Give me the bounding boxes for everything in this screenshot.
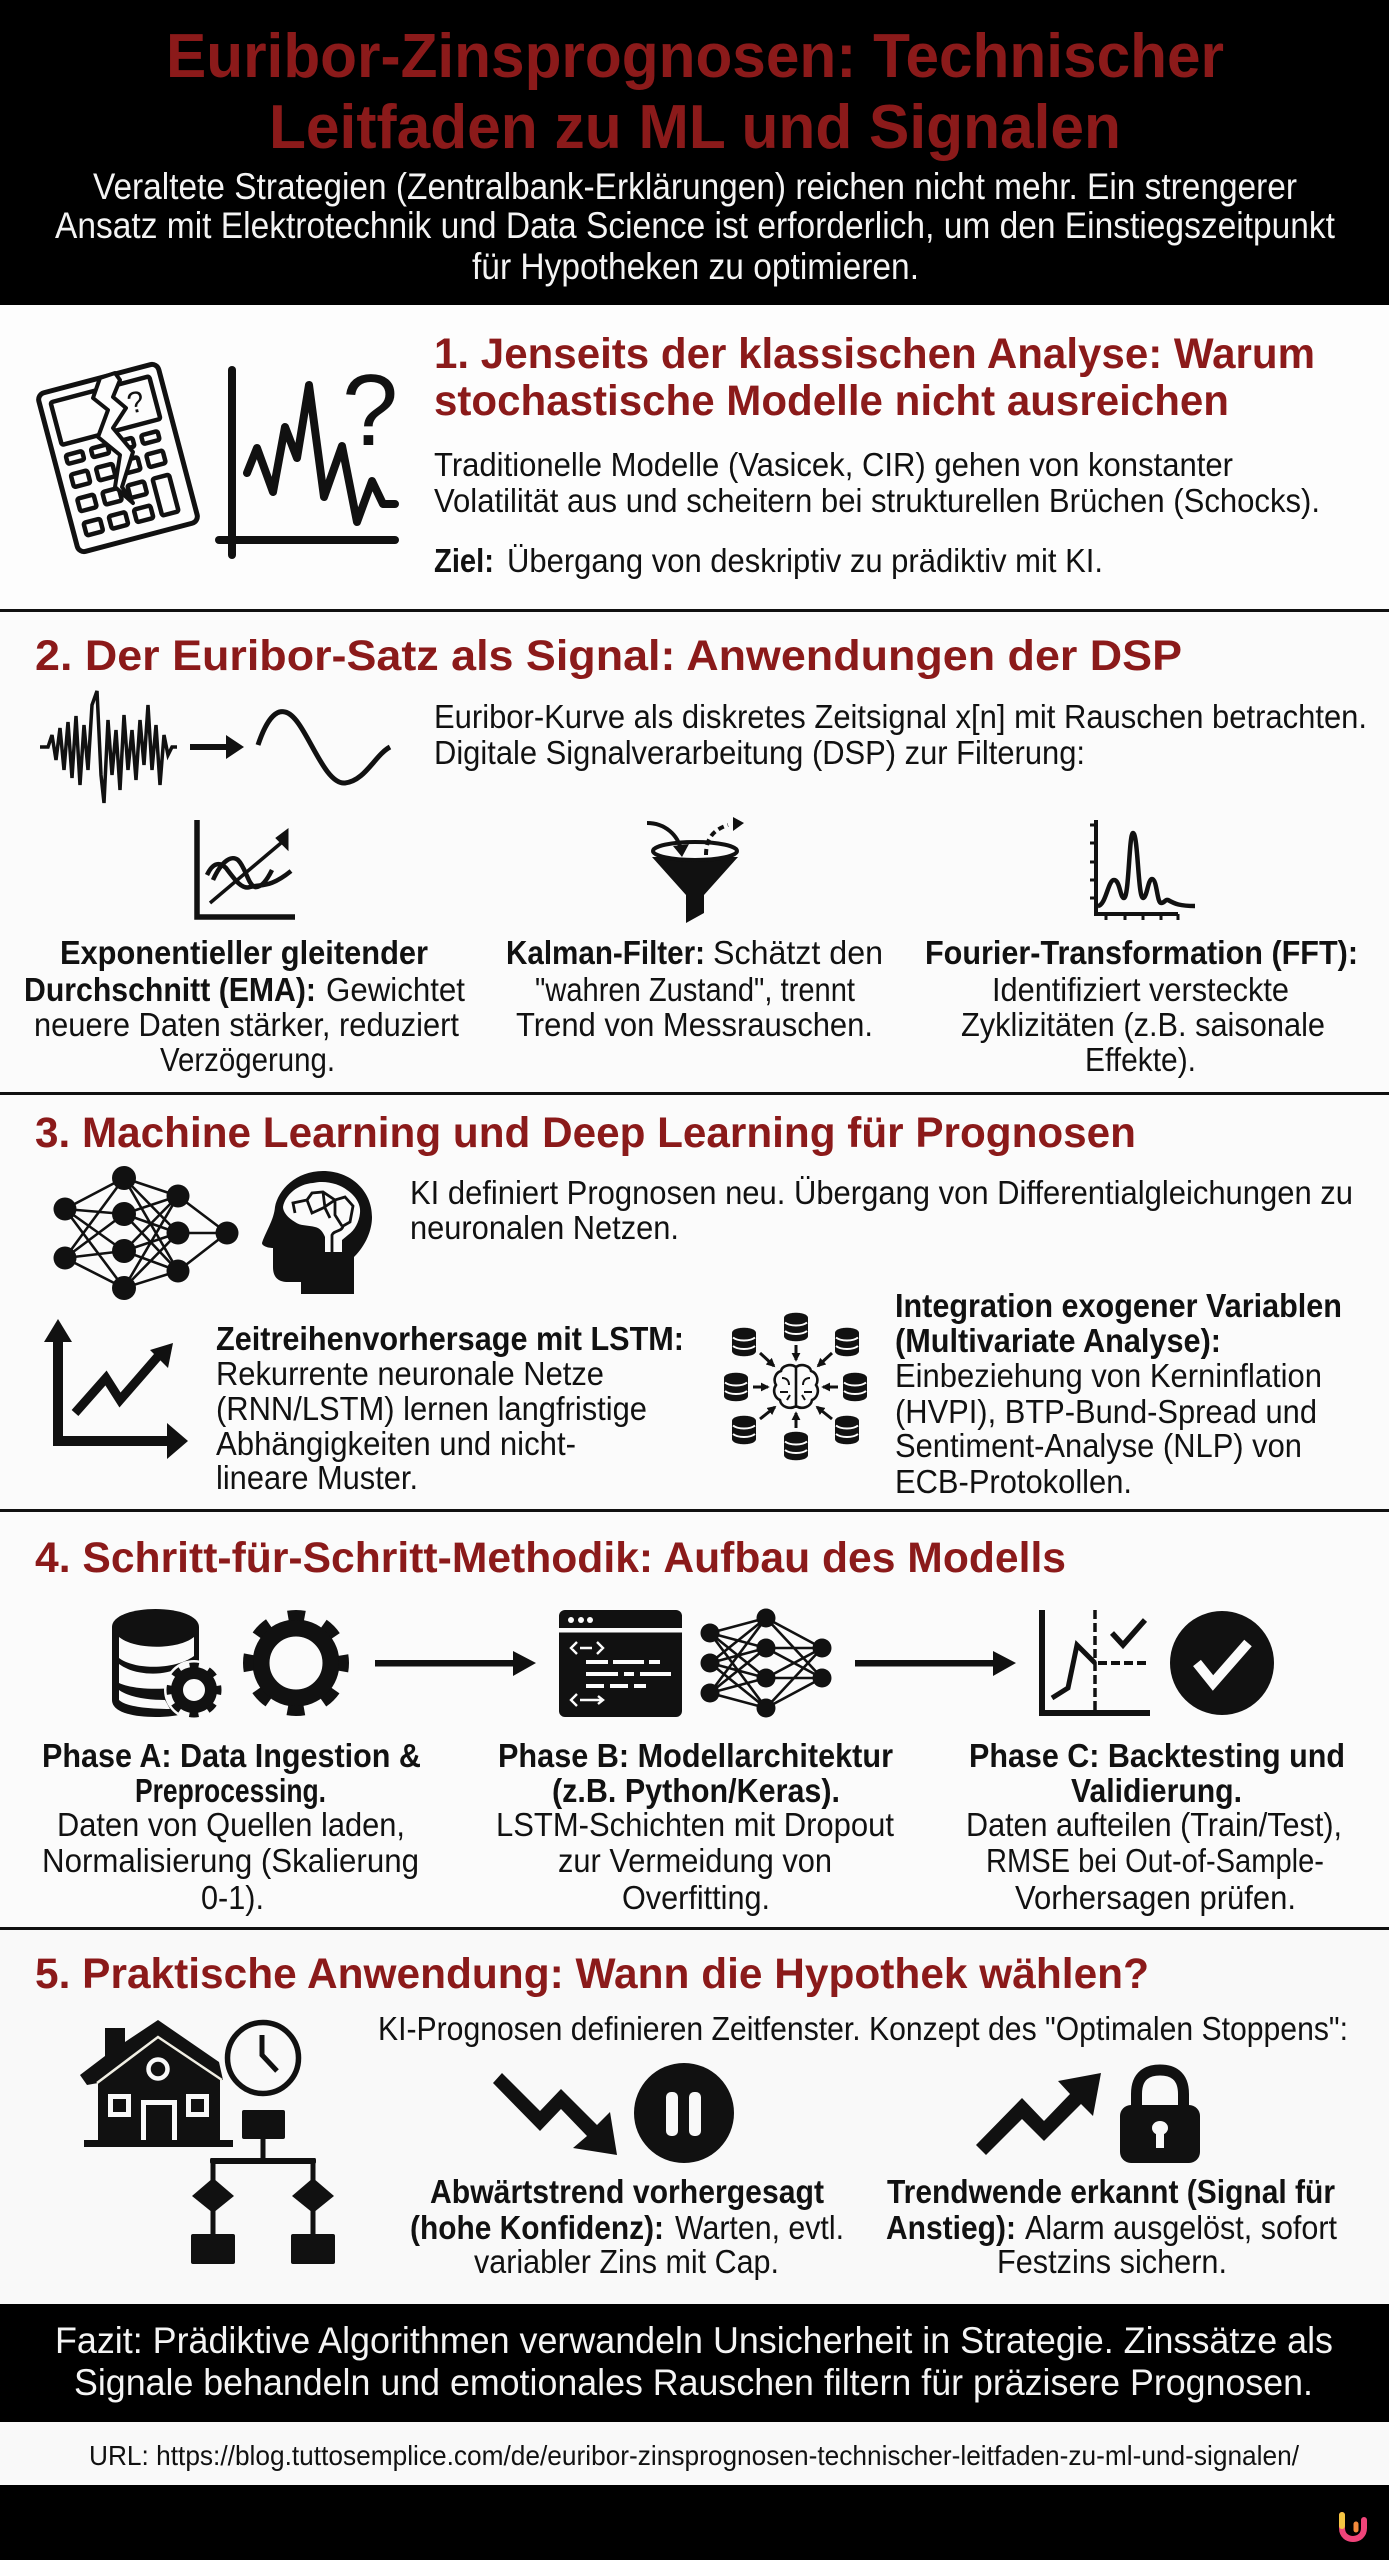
icon: house bbox=[80, 2020, 233, 2147]
text: phase A: Preprocessing. bbox=[135, 1772, 326, 1809]
text: FFT bbox=[925, 934, 1358, 1078]
text: phase B: Phase B: Modellarchitektur bbox=[498, 1737, 893, 1774]
text: phase B: (z.B. Python/Keras). bbox=[552, 1772, 840, 1809]
heading: section 4: 4. Schritt-für-Schritt-Methodik: Aufbau des Modells bbox=[35, 1534, 1066, 1582]
text: exogenous variables: (HVPI), BTP-Bund-Spread und bbox=[895, 1393, 1317, 1430]
text: phase A: Normalisierung (Skalierung bbox=[42, 1842, 419, 1879]
title: Leitfaden zu ML und Signalen bbox=[269, 93, 1121, 162]
subtitle: für Hypotheken zu optimieren. bbox=[472, 246, 919, 287]
text: phase B bbox=[496, 1737, 894, 1916]
text: LSTM: lineare Muster. bbox=[216, 1459, 418, 1496]
subtitle: Veraltete Strategien (Zentralbank-Erklärungen) reichen nicht mehr. Ein strengerer bbox=[93, 166, 1297, 207]
icon: database with gear bbox=[112, 1609, 224, 1720]
icon: check circle bbox=[1170, 1611, 1274, 1715]
text: FFT: Effekte). bbox=[1085, 1041, 1196, 1078]
text: trend reversal: Festzins sichern. bbox=[997, 2243, 1227, 2280]
text: section 1 body: Ziel: bbox=[434, 542, 494, 579]
text: EMA bbox=[24, 934, 465, 1078]
icon: cracked calculator bbox=[37, 363, 199, 553]
text: FFT: Zyklizitäten (z.B. saisonale bbox=[961, 1006, 1325, 1043]
text: trend reversal: Anstieg): bbox=[886, 2209, 1016, 2246]
text: EMA: Exponentieller gleitender bbox=[60, 934, 428, 971]
text: section 2 intro bbox=[434, 698, 1367, 771]
icon: upward trend arrow bbox=[976, 2073, 1101, 2155]
text: section 1 body: Traditionelle Modelle (Vasicek, CIR) gehen von konstanter bbox=[434, 446, 1233, 483]
icon: noisy signal to smooth wave bbox=[40, 691, 390, 803]
icon: downward trend arrow bbox=[493, 2073, 617, 2155]
heading: section 1: stochastische Modelle nicht ausreichen bbox=[434, 377, 1229, 425]
panel: section 3 bbox=[0, 1095, 1389, 1510]
icon: gear bbox=[248, 1615, 344, 1711]
text: trend reversal: Trendwende erkannt (Signal für bbox=[887, 2173, 1335, 2210]
text: section 3 intro bbox=[410, 1174, 1353, 1246]
icon: volatile chart with question mark: ? bbox=[342, 355, 398, 467]
text: exogenous variables: Sentiment-Analyse (NLP) von bbox=[895, 1427, 1302, 1464]
heading: section 5: 5. Praktische Anwendung: Wann die Hypothek wählen? bbox=[35, 1950, 1149, 1998]
text: LSTM: Zeitreihenvorhersage mit LSTM: bbox=[216, 1320, 684, 1357]
text: phase C: Daten aufteilen (Train/Test), bbox=[966, 1806, 1342, 1843]
icon: pause bbox=[634, 2063, 734, 2163]
title: Euribor-Zinsprognosen: Technischer bbox=[166, 22, 1224, 91]
panel: section 2 bbox=[0, 612, 1389, 1093]
heading: section 1: 1. Jenseits der klassischen Analyse: Warum bbox=[434, 330, 1315, 378]
text: LSTM: Abhängigkeiten und nicht- bbox=[216, 1425, 576, 1462]
icon: cracked calculator: ? bbox=[124, 385, 147, 421]
heading: section 2: 2. Der Euribor-Satz als Signal: Anwendungen der DSP bbox=[35, 632, 1182, 680]
text: exogenous variables: ECB-Protokollen. bbox=[895, 1463, 1132, 1500]
text: downward trend: variabler Zins mit Cap. bbox=[474, 2243, 779, 2280]
text: downward trend bbox=[410, 2173, 844, 2280]
text: trend reversal bbox=[886, 2173, 1337, 2280]
text: LSTM bbox=[216, 1320, 684, 1496]
footer bar bbox=[0, 2485, 1389, 2560]
text: downward trend: Warten, evtl. bbox=[675, 2209, 844, 2246]
text: phase C bbox=[966, 1737, 1345, 1916]
text: section 3 intro: KI definiert Prognosen neu. Übergang von Differentialgleichungen zu bbox=[410, 1174, 1353, 1211]
text: Kalman: Trend von Messrauschen. bbox=[516, 1006, 873, 1043]
panel: conclusion bbox=[0, 2304, 1389, 2422]
icon: EMA chart bbox=[197, 820, 295, 917]
icon: brain with data sources bbox=[724, 1313, 867, 1460]
text: phase A: Phase A: Data Ingestion & bbox=[42, 1737, 421, 1774]
text: LSTM: Rekurrente neuronale Netze bbox=[216, 1355, 604, 1392]
icon: growth chart with arrows bbox=[44, 1319, 188, 1459]
text: section 1 body bbox=[434, 446, 1320, 579]
icon: clock bbox=[228, 2022, 298, 2094]
panel: section 5 bbox=[0, 1930, 1389, 2304]
text: phase C: Phase C: Backtesting und bbox=[969, 1737, 1345, 1774]
subtitle bbox=[55, 166, 1336, 287]
panel: conclusion: Fazit: Prädiktive Algorithmen verwandeln Unsicherheit in Strategie. Zinssätze als bbox=[55, 2320, 1333, 2361]
panel: section 4 bbox=[0, 1512, 1389, 1928]
text: EMA: Gewichtet bbox=[326, 971, 465, 1008]
icon: backtesting chart bbox=[1042, 1610, 1150, 1713]
panel: header bbox=[0, 0, 1389, 305]
text: exogenous variables: Integration exogener Variablen bbox=[895, 1287, 1342, 1324]
icon: small neural network bbox=[700, 1608, 832, 1718]
arrow: phase A to B bbox=[375, 1651, 536, 1676]
text: downward trend: Abwärtstrend vorhergesagt bbox=[430, 2173, 824, 2210]
arrow: phase B to C bbox=[855, 1651, 1016, 1676]
icon: volatile chart with question mark bbox=[219, 355, 398, 555]
icon: neural network bbox=[54, 1166, 238, 1300]
text: section 1 body: Volatilität aus und scheitern bei strukturellen Brüchen (Schocks). bbox=[434, 482, 1320, 519]
text: Kalman: Schätzt den bbox=[713, 934, 883, 971]
panel: url: URL: https://blog.tuttosemplice.com/de/euribor-zinsprognosen-technischer-leitfaden-zu-ml-und-signalen/ bbox=[89, 2440, 1299, 2471]
text: downward trend: (hohe Konfidenz): bbox=[410, 2209, 664, 2246]
text: phase B: Overfitting. bbox=[622, 1879, 770, 1916]
text: exogenous variables bbox=[895, 1287, 1342, 1500]
text: section 1 body: Übergang von deskriptiv zu prädiktiv mit KI. bbox=[507, 542, 1103, 579]
heading: section 1 bbox=[434, 330, 1315, 425]
text: exogenous variables: Einbeziehung von Kerninflation bbox=[895, 1357, 1322, 1394]
text: phase C: Vorhersagen prüfen. bbox=[1015, 1879, 1296, 1916]
icon: FFT spectrum bbox=[1090, 820, 1195, 920]
text: phase B: LSTM-Schichten mit Dropout bbox=[496, 1806, 894, 1843]
text: Kalman bbox=[506, 934, 883, 1043]
text: EMA: neuere Daten stärker, reduziert bbox=[34, 1006, 459, 1043]
text: LSTM: (RNN/LSTM) lernen langfristige bbox=[216, 1390, 647, 1427]
text: phase C: RMSE bei Out-of-Sample- bbox=[986, 1842, 1324, 1879]
text: phase B: zur Vermeidung von bbox=[558, 1842, 832, 1879]
text: phase A: 0-1). bbox=[201, 1879, 264, 1916]
icon: padlock bbox=[1120, 2070, 1200, 2163]
text: EMA: Verzögerung. bbox=[160, 1041, 335, 1078]
text: EMA: Durchschnitt (EMA): bbox=[24, 971, 316, 1008]
icon: head with brain bbox=[262, 1171, 372, 1294]
text: FFT: Fourier-Transformation (FFT): bbox=[925, 934, 1358, 971]
icon: code window bbox=[559, 1610, 682, 1717]
text: Kalman: Kalman-Filter: bbox=[506, 934, 705, 971]
text: section 3 intro: neuronalen Netzen. bbox=[410, 1209, 679, 1246]
heading: section 3: 3. Machine Learning und Deep Learning für Prognosen bbox=[35, 1109, 1136, 1157]
text: section 2 intro: Digitale Signalverarbeitung (DSP) zur Filterung: bbox=[434, 734, 1085, 771]
text: exogenous variables: (Multivariate Analyse): bbox=[895, 1322, 1221, 1359]
text: phase A: Daten von Quellen laden, bbox=[57, 1806, 405, 1843]
icon: funnel filter bbox=[647, 817, 744, 923]
panel: conclusion: Signale behandeln und emotionales Rauschen filtern für präzisere Prognosen. bbox=[74, 2362, 1313, 2403]
panel: url bbox=[0, 2422, 1389, 2485]
text: phase C: Validierung. bbox=[1071, 1772, 1242, 1809]
text: FFT: Identifiziert versteckte bbox=[992, 971, 1289, 1008]
text: phase A bbox=[42, 1737, 421, 1916]
text: trend reversal: Alarm ausgelöst, sofort bbox=[1025, 2209, 1337, 2246]
panel: section 1 bbox=[0, 305, 1389, 611]
icon: decision flowchart bbox=[191, 2110, 335, 2264]
title bbox=[166, 22, 1224, 162]
icon: logo bbox=[1342, 2515, 1364, 2539]
text: Kalman: "wahren Zustand", trennt bbox=[535, 971, 855, 1008]
